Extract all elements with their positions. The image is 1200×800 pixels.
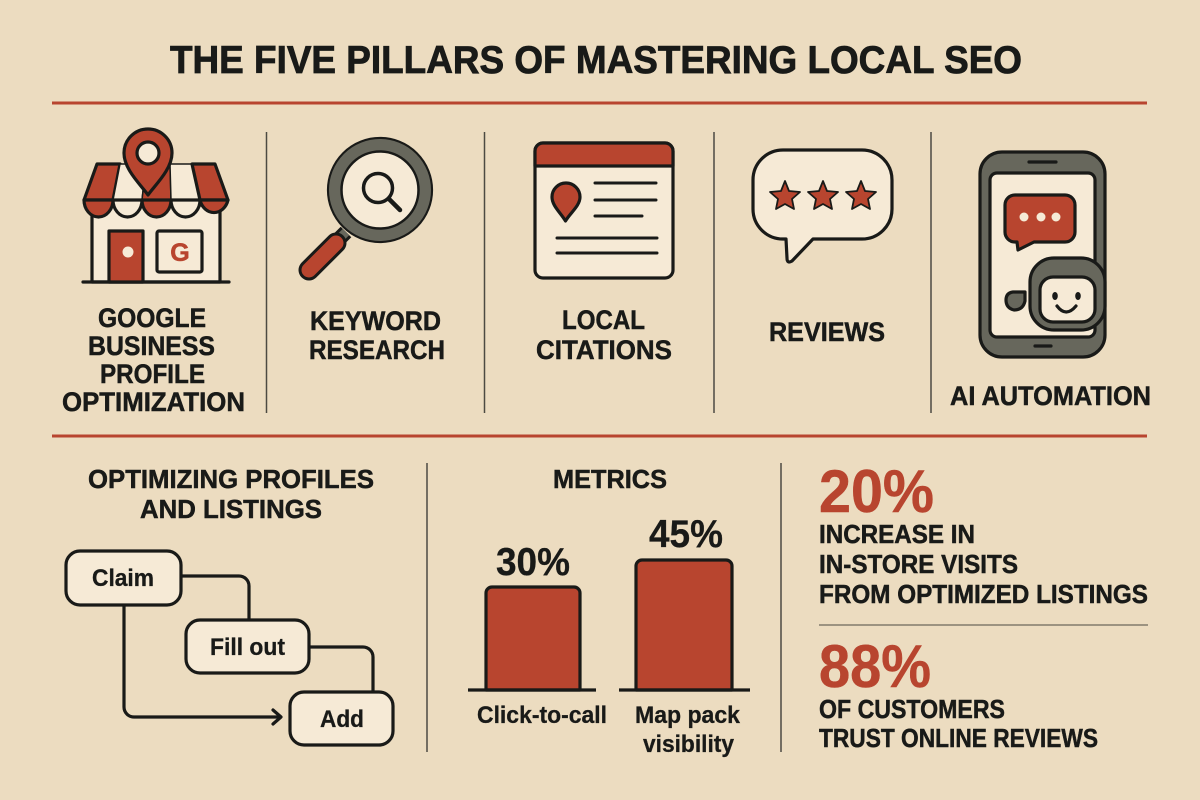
title: THE FIVE PILLARS OF MASTERING LOCAL SEO <box>170 39 1022 82</box>
arrow: Fill out to Add <box>309 647 373 692</box>
stat: 20%: IN-STORE VISITS <box>819 549 1018 579</box>
label: AI Automation: AI AUTOMATION <box>950 381 1151 411</box>
panel: AI Automation <box>950 152 1151 411</box>
arrow: Claim to Add <box>124 605 281 724</box>
arrow: Claim to Fill out <box>181 576 249 620</box>
step: Add: Add <box>320 706 364 733</box>
bar: Map pack visibility 45%: visibility <box>643 731 735 758</box>
label: Google Business Profile Optimization: OPTIMIZATION <box>62 387 245 417</box>
step: Add <box>290 692 393 745</box>
step: Fill out: Fill out <box>210 634 285 661</box>
icon: storefront with map pin <box>83 129 229 282</box>
label: Keyword Research: KEYWORD <box>310 306 441 336</box>
stat: 20%: FROM OPTIMIZED LISTINGS <box>819 579 1148 609</box>
stat: 88%: TRUST ONLINE REVIEWS <box>819 723 1098 753</box>
icon: speech bubble with stars <box>753 150 892 262</box>
stat: 20%: 20% <box>819 458 934 525</box>
panel: Google Business Profile Optimization <box>62 129 245 417</box>
panel: Metrics <box>468 464 750 758</box>
panel: Reviews <box>753 150 892 347</box>
label: Google Business Profile Optimization: PROFILE <box>100 359 205 389</box>
bar: Map pack visibility 45%: Map pack <box>635 702 741 729</box>
label: Google Business Profile Optimization: GOOGLE <box>98 303 206 333</box>
icon: phone with chatbot <box>980 152 1105 357</box>
bar: Map pack visibility 45%: 45% <box>649 513 723 556</box>
label: Keyword Research <box>309 306 445 365</box>
panel: Optimizing profiles and listings <box>66 464 393 745</box>
panel: statistics <box>819 458 1148 753</box>
bar: Click-to-call 30%: 30% <box>496 541 570 584</box>
stat: 20% <box>819 458 1148 609</box>
heading: Optimizing Profiles and Listings: AND LISTINGS <box>140 494 322 524</box>
bar: Click-to-call 30%: Click-to-call <box>477 702 607 729</box>
panel: Keyword Research <box>309 138 445 365</box>
step: Claim <box>66 551 181 605</box>
bar chart <box>468 513 750 758</box>
label: Keyword Research: RESEARCH <box>309 335 445 365</box>
bar: Map pack visibility 45% <box>619 513 750 758</box>
icon: magnifying glass <box>309 138 432 270</box>
label: Reviews: REVIEWS <box>769 317 885 347</box>
heading: Optimizing Profiles and Listings <box>88 464 374 524</box>
panel: Local Citations <box>535 143 673 365</box>
heading: Metrics: METRICS <box>553 464 667 494</box>
label: Local Citations: LOCAL <box>562 305 645 335</box>
bar: Click-to-call 30% <box>468 541 607 729</box>
step: Fill out <box>186 620 309 673</box>
stat: 20%: INCREASE IN <box>819 519 975 549</box>
heading: Optimizing Profiles and Listings: OPTIMIZING PROFILES <box>88 464 374 494</box>
label: Local Citations <box>536 305 672 365</box>
icon: storefront with map pin: G <box>170 239 190 267</box>
stat: 88%: 88% <box>819 633 931 700</box>
label: Local Citations: CITATIONS <box>536 335 672 365</box>
label: Google Business Profile Optimization: BUSINESS <box>88 331 215 361</box>
stat: 88% <box>819 633 1098 753</box>
icon: listing page <box>535 143 673 278</box>
step: Claim: Claim <box>92 565 154 592</box>
label: Google Business Profile Optimization <box>62 303 245 417</box>
stat: 88%: OF CUSTOMERS <box>819 694 1005 724</box>
